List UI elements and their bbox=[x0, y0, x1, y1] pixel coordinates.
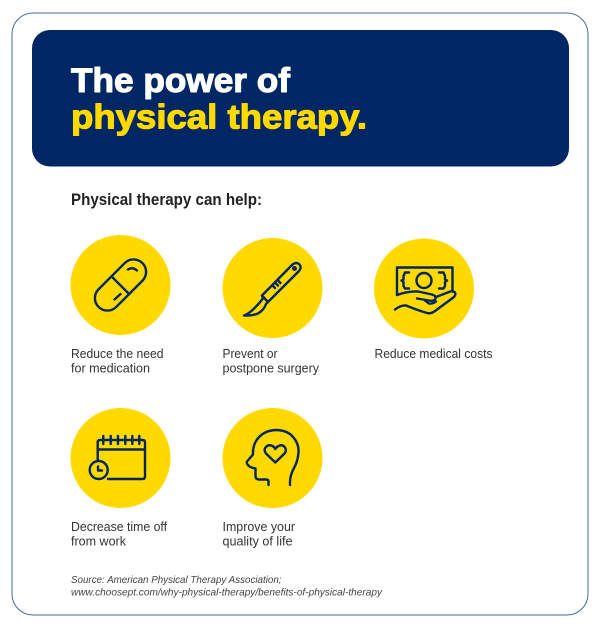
title banner bbox=[32, 30, 569, 166]
item: decrease time off from work bbox=[70, 408, 170, 548]
label bbox=[71, 520, 168, 548]
title line 2: physical therapy. bbox=[71, 98, 367, 136]
item: reduce medical costs bbox=[374, 238, 492, 361]
source note bbox=[71, 574, 383, 598]
label bbox=[71, 347, 164, 376]
icon: scalpel bbox=[222, 238, 322, 338]
item: improve your quality of life bbox=[222, 408, 322, 548]
label: Prevent or bbox=[222, 347, 278, 361]
label: Reduce the need bbox=[71, 347, 164, 361]
label: for medication bbox=[71, 362, 150, 376]
item: reduce the need for medication bbox=[70, 235, 170, 376]
source note: www.choosept.com/why-physical-therapy/benefits-of-physical-therapy bbox=[71, 586, 383, 598]
label: Improve your bbox=[222, 520, 295, 534]
item: prevent or postpone surgery bbox=[222, 238, 322, 376]
source note: Source: American Physical Therapy Association; bbox=[71, 574, 282, 586]
icon: calendar and clock bbox=[70, 408, 170, 508]
label bbox=[222, 347, 320, 376]
label bbox=[222, 520, 295, 548]
subheading: Physical therapy can help: bbox=[71, 191, 262, 209]
icon: pill bbox=[70, 235, 170, 335]
icon: head with heart bbox=[222, 408, 322, 508]
title line 1: The power of bbox=[71, 62, 291, 100]
label: quality of life bbox=[222, 534, 293, 548]
label: Reduce medical costs bbox=[374, 347, 492, 361]
label: Decrease time off bbox=[71, 520, 168, 534]
label: postpone surgery bbox=[222, 362, 320, 376]
label: from work bbox=[71, 534, 127, 548]
icon: money in hand bbox=[374, 238, 474, 338]
